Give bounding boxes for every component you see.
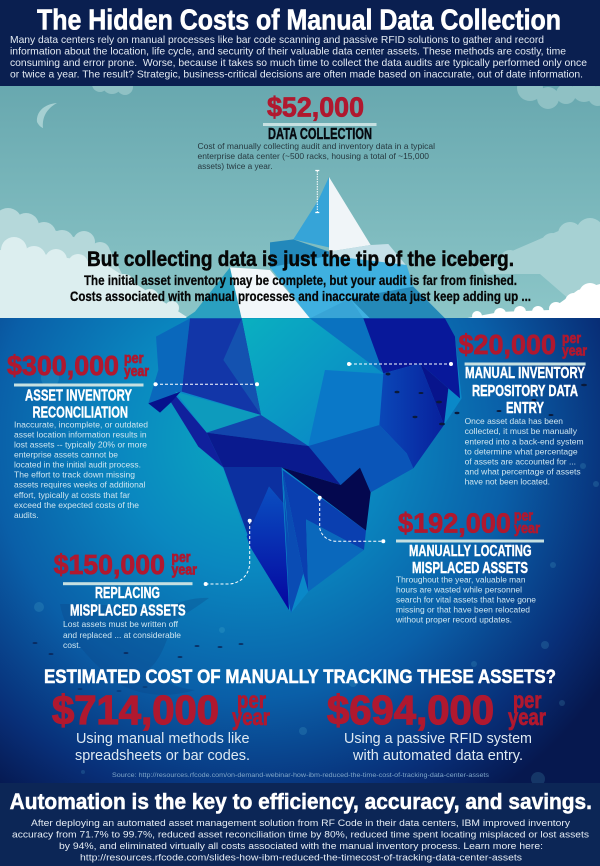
connector: replacing misplaced assets bbox=[204, 519, 252, 586]
callout: replacing misplaced assets: $150,000 bbox=[54, 549, 165, 580]
bubbles bbox=[34, 369, 599, 786]
description: enterprise data center (~500 racks, housing a total of ~15,000 bbox=[198, 151, 429, 161]
callout: manually locating misplaced assets: hours are wasted while personnel bbox=[396, 585, 522, 595]
RFID total: per bbox=[513, 687, 542, 713]
callout: replacing misplaced assets: cost. bbox=[63, 640, 81, 650]
manual total: per bbox=[237, 687, 266, 713]
callout: manually locating misplaced assets: $192,000 bbox=[398, 508, 511, 539]
connector: repository data entry bbox=[347, 362, 453, 366]
callout: manual inventory repository data entry bbox=[458, 329, 587, 487]
callout: asset inventory reconciliation: per bbox=[124, 351, 144, 367]
fish school lower bbox=[32, 642, 244, 692]
intro text: or twice a year. The result? Strategic, business-critical decisions are often made based on inaccurate, out of date information. bbox=[10, 70, 583, 80]
underwater background bbox=[0, 318, 600, 784]
callout: manual inventory repository data entry: entered into a back-end system bbox=[465, 436, 584, 446]
manual total bbox=[52, 687, 270, 764]
callout: replacing misplaced assets bbox=[54, 549, 197, 650]
callout: manually locating misplaced assets: MISPLACED ASSETS bbox=[412, 560, 528, 577]
callout: manual inventory repository data entry: of assets are accounted for ... bbox=[465, 456, 576, 466]
connector: reconciliation bbox=[154, 382, 259, 386]
callout: replacing misplaced assets: per bbox=[172, 550, 191, 566]
heading: DATA COLLECTION bbox=[268, 126, 372, 143]
callout: replacing misplaced assets: and replaced ... at considerable bbox=[63, 630, 181, 640]
iceberg above water bbox=[185, 177, 445, 318]
callout: manual inventory repository data entry: collected, it must be manually bbox=[465, 426, 578, 436]
iceberg below water bbox=[148, 318, 462, 613]
callout: manually locating misplaced assets: year bbox=[514, 521, 540, 537]
callout: asset inventory reconciliation: audits. bbox=[14, 510, 39, 520]
callout: manual inventory repository data entry: to determine what percentage bbox=[465, 446, 578, 456]
manual total: spreadsheets or bar codes. bbox=[75, 747, 250, 764]
header panel bbox=[0, 0, 600, 86]
callout: manually locating misplaced assets: per bbox=[514, 509, 533, 525]
callout: manually locating misplaced assets: missing or that have been relocated bbox=[396, 605, 530, 615]
subheading bbox=[70, 273, 531, 304]
footer text: After deploying an automated asset management solution from RF Code in their data centers, IBM improved inventory bbox=[31, 818, 570, 829]
callout: asset inventory reconciliation: Inaccurate, incomplete, or outdated bbox=[14, 419, 148, 429]
intro text: Many data centers rely on manual processes like bar code scanning and passive RFID solutions to gather and record bbox=[10, 35, 544, 46]
callout: asset inventory reconciliation: RECONCILIATION bbox=[32, 404, 128, 422]
callout: data collection bbox=[198, 92, 435, 171]
callout: asset inventory reconciliation: assets requires weeks of additional bbox=[14, 480, 145, 490]
manual total: year bbox=[232, 704, 270, 730]
estimated cost section bbox=[44, 666, 556, 779]
callout: manual inventory repository data entry: per bbox=[562, 331, 581, 347]
callout: asset inventory reconciliation bbox=[7, 350, 149, 520]
description bbox=[198, 141, 435, 171]
subheading: The initial asset inventory may be complete, but your audit is far from finished. bbox=[84, 273, 517, 288]
icon: crescent moon bbox=[37, 103, 57, 128]
RFID total: year bbox=[508, 704, 546, 730]
callout: asset inventory reconciliation: exceed the expected costs of the bbox=[14, 500, 139, 510]
callout: asset inventory reconciliation: lost assets -- typically 20% or more bbox=[14, 440, 147, 450]
RFID total bbox=[327, 687, 546, 764]
callout: asset inventory reconciliation: The effort to track down missing bbox=[14, 470, 135, 480]
fish school bbox=[386, 372, 587, 425]
callout: asset inventory reconciliation: $300,000 bbox=[7, 350, 119, 381]
footer text: accuracy from 71.7% to 99.7%, reduced asset reconciliation time by 80%, reduced time spent locating misplaced or lost assets bbox=[12, 830, 589, 840]
callout: manually locating misplaced assets: search for vital assets that have gone bbox=[396, 595, 536, 605]
callout: manual inventory repository data entry: and what percentage of assets bbox=[465, 467, 581, 477]
callout: replacing misplaced assets: Lost assets must be written off bbox=[63, 619, 179, 629]
sky background bbox=[0, 86, 600, 319]
intro text: consuming and error prone. Worse, because it takes so much time to collect the data audits are typically performed only once bbox=[10, 58, 587, 69]
callout: manual inventory repository data entry: Once asset data has been bbox=[465, 416, 563, 426]
whale silhouette bbox=[60, 598, 209, 695]
callout: asset inventory reconciliation: enterprise assets cannot be bbox=[14, 450, 118, 460]
connector: data collection bbox=[315, 170, 319, 212]
callout: replacing misplaced assets: MISPLACED ASSETS bbox=[70, 603, 186, 620]
callout: manual inventory repository data entry: ENTRY bbox=[506, 400, 544, 417]
footer panel bbox=[0, 783, 600, 866]
callout: asset inventory reconciliation: effort, typically at costs that far bbox=[14, 490, 130, 500]
clouds bbox=[0, 74, 600, 321]
intro text: information about the location, life cycle, and security of their valuable data center assets. These methods are costly, time bbox=[10, 46, 566, 58]
cost figure: $52,000 bbox=[267, 92, 364, 122]
callout: manual inventory repository data entry: have not been located. bbox=[465, 477, 550, 487]
callout: manually locating misplaced assets: MANUALLY LOCATING bbox=[409, 543, 532, 560]
source: Source: http://resources.rfcode.com/on-demand-webinar-how-ibm-reduced-the-time-cost-of-tracking-data-center-assets bbox=[112, 772, 490, 779]
callout: manual inventory repository data entry: $20,000 bbox=[458, 329, 556, 360]
callout: replacing misplaced assets: REPLACING bbox=[95, 585, 160, 602]
callout: manually locating misplaced assets: without proper record updates. bbox=[395, 615, 512, 625]
callout: asset inventory reconciliation: asset location information results in bbox=[14, 429, 147, 439]
footer text bbox=[12, 818, 589, 864]
intro text bbox=[10, 35, 587, 80]
connector: locating misplaced assets bbox=[318, 496, 385, 543]
callout: manually locating misplaced assets: Throughout the year, valuable man bbox=[396, 575, 526, 585]
manual total: $714,000 bbox=[52, 687, 219, 733]
RFID total: $694,000 bbox=[327, 687, 494, 733]
callout: asset inventory reconciliation: located in the initial audit process. bbox=[14, 460, 141, 470]
RFID total: with automated data entry. bbox=[352, 747, 523, 764]
subheading: Costs associated with manual processes and inaccurate data just keep adding up ... bbox=[70, 289, 531, 304]
manual total: Using manual methods like bbox=[76, 730, 250, 747]
heading: tip of the iceberg bbox=[70, 247, 531, 304]
RFID total: Using a passive RFID system bbox=[344, 730, 532, 747]
callout: asset inventory reconciliation: year bbox=[124, 364, 149, 380]
callout: manual inventory repository data entry: year bbox=[562, 344, 587, 360]
description: Cost of manually collecting audit and inventory data in a typical bbox=[198, 141, 435, 151]
description: assets) twice a year. bbox=[198, 161, 272, 171]
callout: asset inventory reconciliation: ASSET INVENTORY bbox=[25, 388, 132, 404]
footer text: by 94%, and eliminated virtually all costs associated with the manual inventory process. Learn more here: bbox=[59, 841, 543, 852]
callout: manually locating misplaced assets bbox=[395, 508, 544, 625]
callout: replacing misplaced assets: year bbox=[172, 563, 197, 579]
heading: tip of the iceberg: But collecting data is just the tip of the iceberg. bbox=[87, 247, 514, 271]
footer text: http://resources.rfcode.com/slides-how-ibm-reduced-the-timecost-of-tracking-data-center-assets bbox=[80, 852, 522, 864]
